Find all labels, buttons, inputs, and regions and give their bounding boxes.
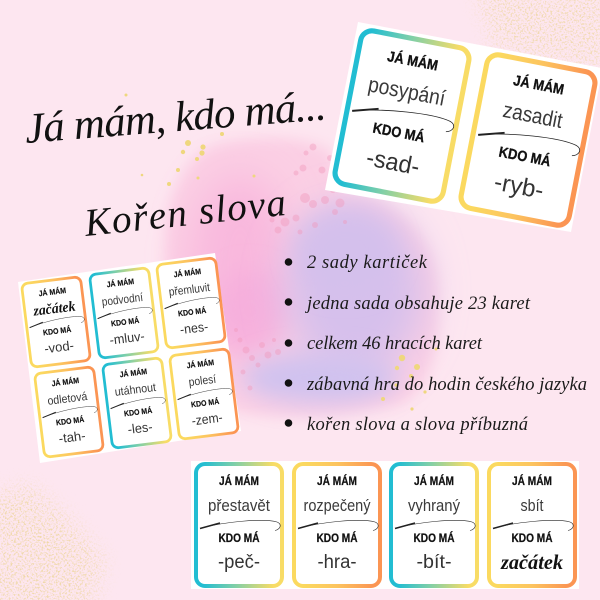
subtitle: Kořen slova <box>81 181 288 245</box>
card: přestavět: přestavět <box>208 496 270 515</box>
card: zasadit <box>459 53 597 227</box>
card: sbít: začátek <box>500 550 563 574</box>
panel: large rotated cards <box>325 22 600 232</box>
card: přestavět: KDO MÁ <box>218 532 260 545</box>
card: podvodní: JÁ MÁM <box>106 277 135 289</box>
card: zasadit: zasadit <box>501 97 565 133</box>
card: přestavět: -peč- <box>218 552 260 573</box>
bullet: sets: 2 sady kartiček <box>307 253 428 273</box>
card: polesí <box>169 349 239 439</box>
card: zasadit: KDO MÁ <box>497 144 552 170</box>
card: přemluvit: JÁ MÁM <box>173 267 202 279</box>
card: vyhraný: KDO MÁ <box>414 532 454 545</box>
card: odletová <box>34 367 104 457</box>
card: odletová: -tah- <box>58 428 86 446</box>
bullet: cards per set: jedna sada obsahuje 23 karet <box>305 294 531 314</box>
watercolour blob <box>165 138 438 417</box>
card: podvodní: -mluv- <box>109 328 145 348</box>
card: podvodní <box>89 268 159 358</box>
card: přemluvit: přemluvit <box>168 281 211 299</box>
card: začátek: začátek <box>32 299 77 320</box>
card: rozpečený: rozpečený <box>304 496 371 515</box>
card: přemluvit: KDO MÁ <box>178 306 207 318</box>
bullet: total cards: celkem 46 hracích karet <box>307 334 483 354</box>
card: zasadit: -ryb- <box>492 169 546 205</box>
card: začátek: -vod- <box>43 338 75 356</box>
gold splatter dots <box>124 94 438 411</box>
bullet list <box>285 253 587 435</box>
bullet: word root: kořen slova a slova příbuzná <box>307 415 528 435</box>
card: začátek: KDO MÁ <box>43 325 72 337</box>
card: vyhraný: JÁ MÁM <box>414 475 454 488</box>
panel: six small rotated cards <box>18 253 241 463</box>
card: odletová: JÁ MÁM <box>51 376 80 388</box>
card: sbít: sbít <box>520 496 544 515</box>
card: polesí: -zem- <box>191 410 223 428</box>
card: rozpečený <box>294 464 380 586</box>
card: začátek: JÁ MÁM <box>38 286 67 298</box>
card: přemluvit: -nes- <box>179 319 209 337</box>
bullet: fun game: zábavná hra do hodin českého jazyka <box>306 375 587 395</box>
card: podvodní: KDO MÁ <box>111 316 140 328</box>
card: posypání: JÁ MÁM <box>386 48 439 75</box>
card: utáhnout <box>102 358 172 448</box>
card: sbít: KDO MÁ <box>512 532 552 545</box>
title: Já mám, kdo má... <box>23 82 328 153</box>
card: posypání: posypání <box>366 71 448 111</box>
card: posypání <box>333 29 471 203</box>
card: polesí: polesí <box>188 373 218 389</box>
card: utáhnout: JÁ MÁM <box>119 367 148 379</box>
card: utáhnout: KDO MÁ <box>124 406 153 418</box>
card: přestavět <box>196 464 282 586</box>
card: zasadit: JÁ MÁM <box>512 72 565 99</box>
card: vyhraný: vyhraný <box>408 496 460 515</box>
card: přemluvit <box>156 258 226 348</box>
card: sbít: JÁ MÁM <box>512 475 552 488</box>
card: polesí: KDO MÁ <box>191 397 220 409</box>
card: odletová: odletová <box>47 390 88 408</box>
card: vyhraný: -bít- <box>416 552 452 573</box>
card: posypání: -sad- <box>364 144 422 181</box>
card: rozpečený: JÁ MÁM <box>317 475 357 488</box>
card: posypání: KDO MÁ <box>371 120 426 146</box>
card: začátek <box>21 277 91 367</box>
card: polesí: JÁ MÁM <box>186 358 215 370</box>
card: vyhraný <box>391 464 477 586</box>
card: podvodní: podvodní <box>101 291 144 309</box>
card: sbít <box>489 464 575 586</box>
card: přestavět: JÁ MÁM <box>219 475 259 488</box>
pink flowers <box>234 144 347 390</box>
card: odletová: KDO MÁ <box>56 415 85 427</box>
gold spray: bottom left <box>0 485 105 600</box>
card: rozpečený: -hra- <box>318 552 356 573</box>
card: utáhnout: -les- <box>127 419 153 437</box>
card: utáhnout: utáhnout <box>114 381 157 399</box>
card: rozpečený: KDO MÁ <box>316 532 358 545</box>
gold spray: top right <box>475 0 600 70</box>
panel: bottom row of cards <box>191 461 579 589</box>
